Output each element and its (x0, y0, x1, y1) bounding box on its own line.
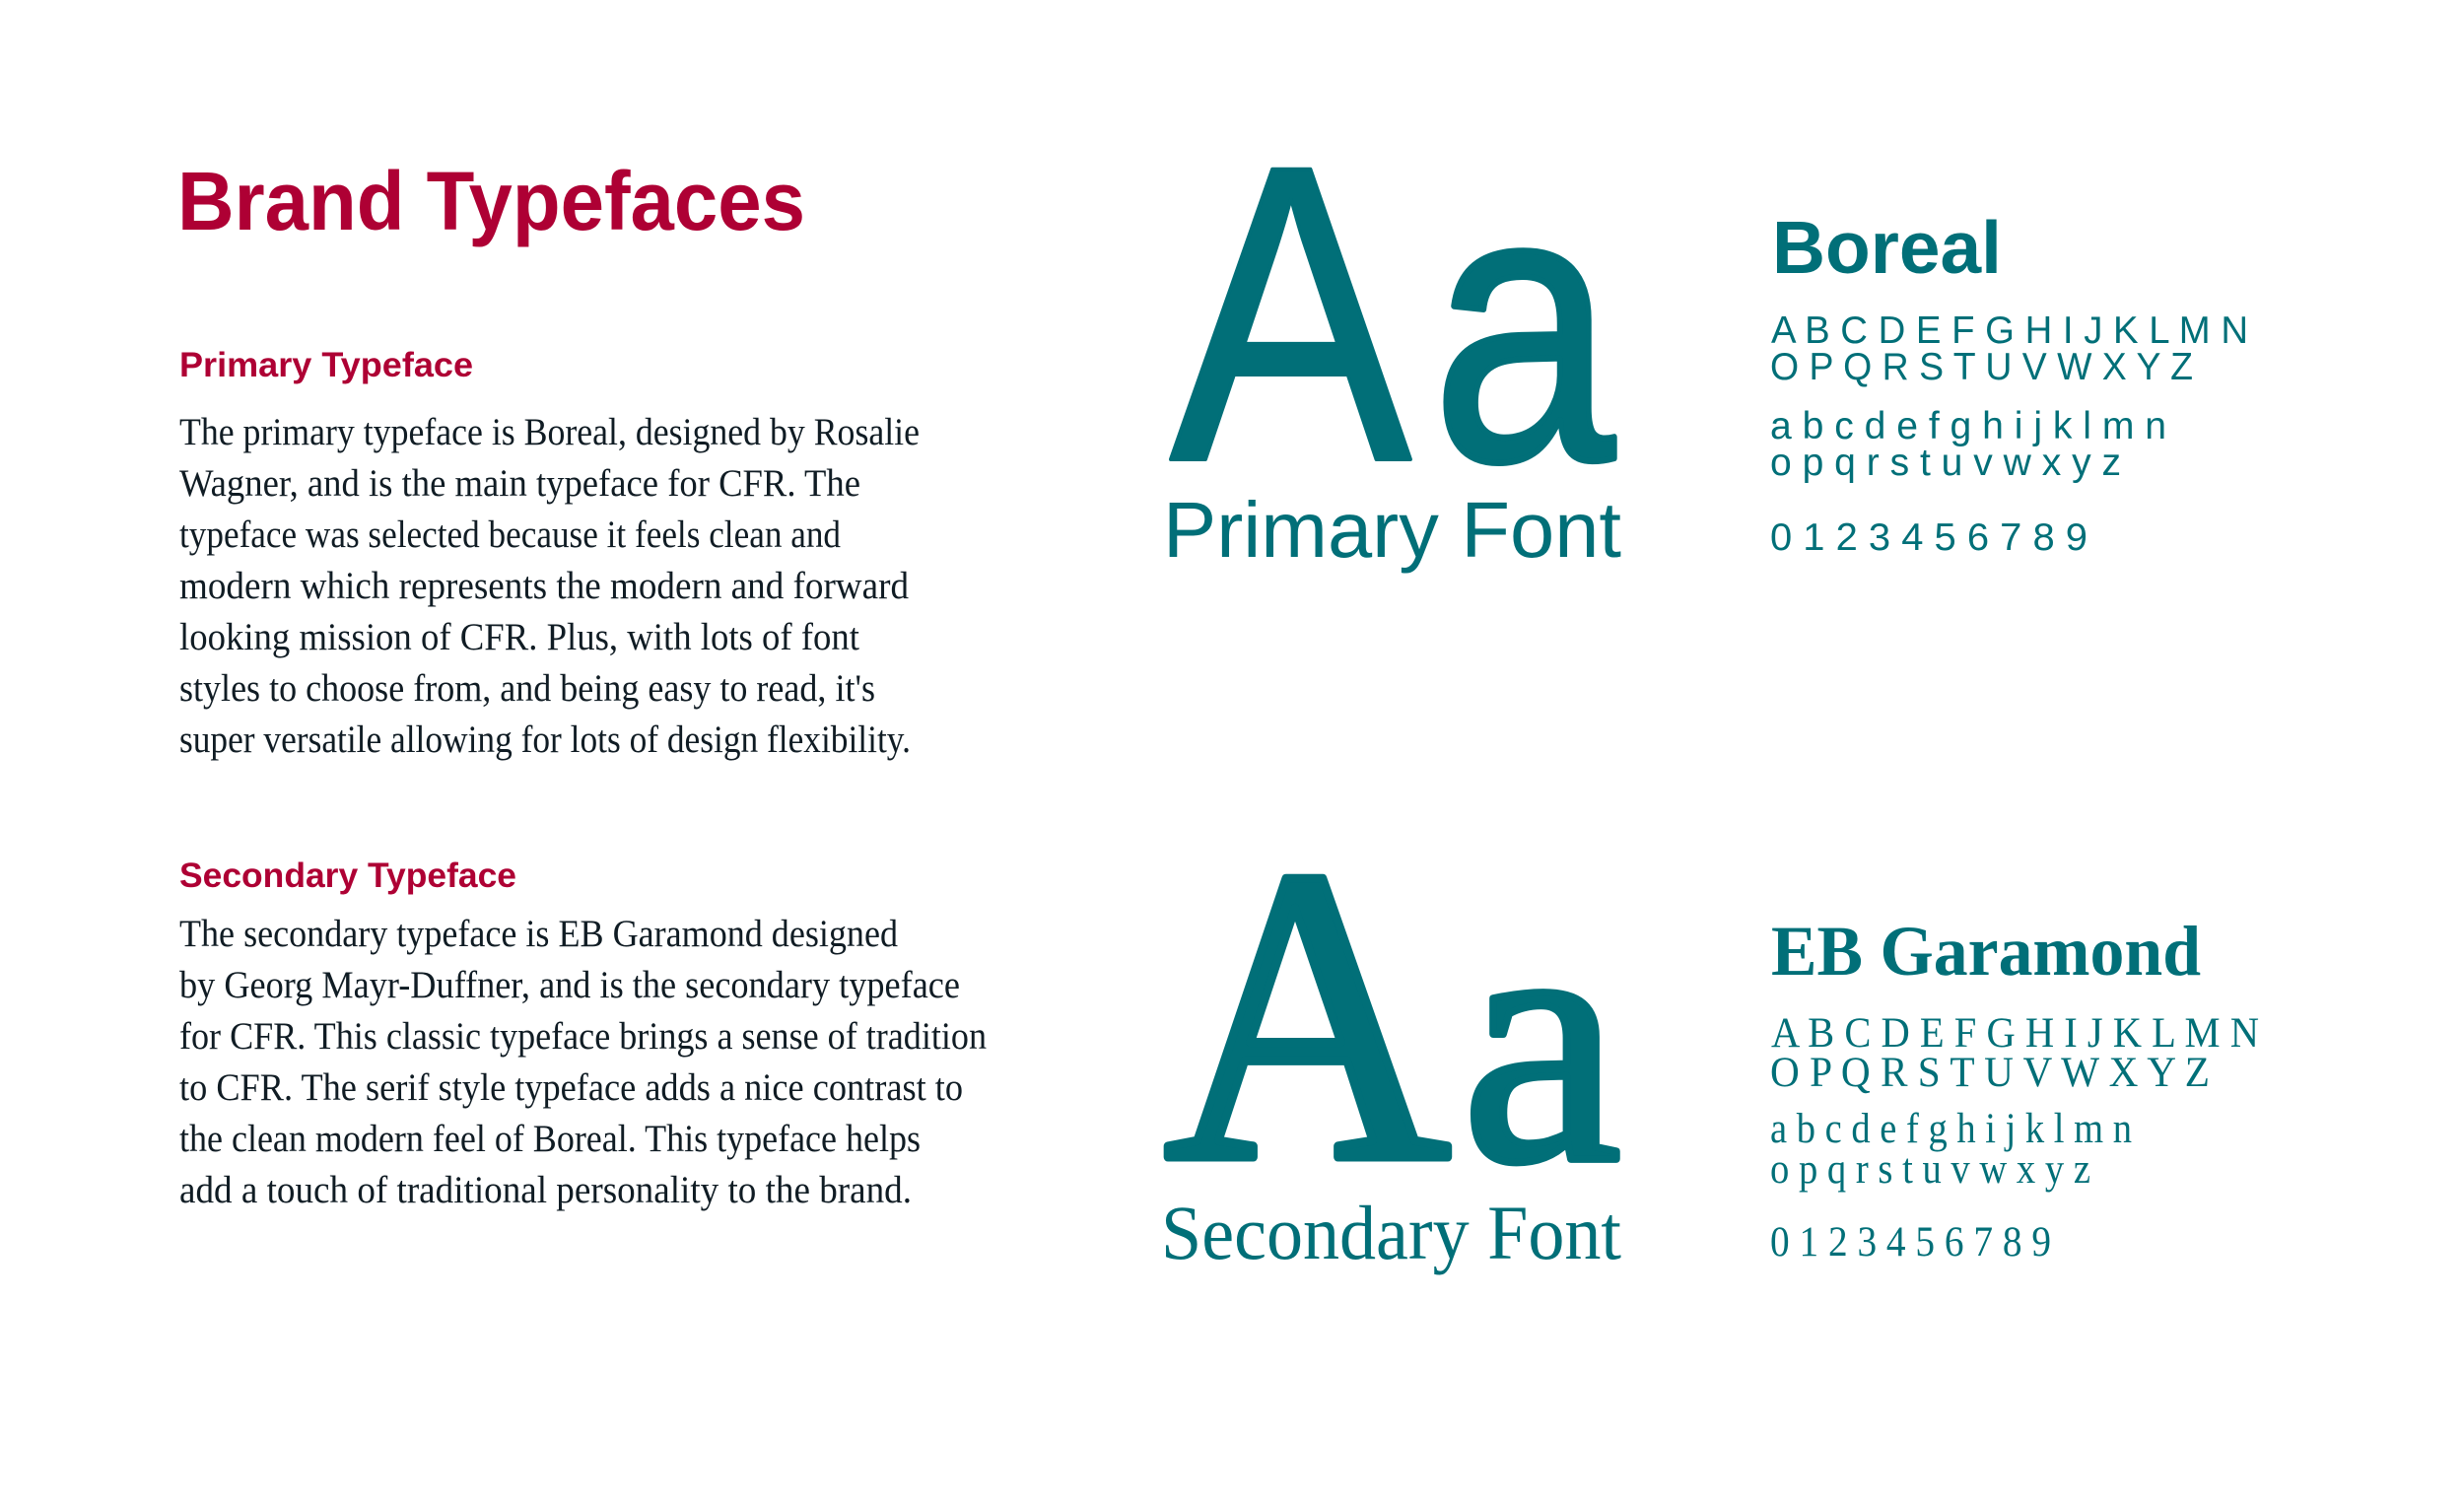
panel: secondary font specimen (1161, 782, 2259, 1275)
text block: primary typeface body: typeface was selected because it feels clean and (179, 513, 841, 556)
large glyph specimen: secondary Aa: A (1164, 782, 1451, 1249)
character set: Boreal: 0 1 2 3 4 5 6 7 8 9 (1770, 516, 2088, 559)
character set: Boreal: a b c d e f g h i j k l m n (1770, 405, 2166, 447)
text block: secondary typeface body: The secondary typeface is EB Garamond designed (179, 913, 898, 955)
character set: EB Garamond (1770, 1010, 2259, 1266)
large glyph specimen: primary Aa: A (1170, 79, 1413, 549)
text block: primary typeface body: super versatile allowing for lots of design flexibility. (179, 719, 911, 761)
text block: secondary typeface body: add a touch of traditional personality to the brand. (179, 1169, 912, 1211)
font name: Boreal: Boreal (1772, 206, 2002, 289)
text block: primary typeface body: The primary typeface is Boreal, designed by Rosalie (179, 411, 920, 453)
character set: EB Garamond: a b c d e f g h i j k l m n (1770, 1106, 2132, 1152)
heading: primary typeface: Primary Typeface (179, 346, 473, 384)
text block: secondary typeface body: for CFR. This classic typeface brings a sense of tradition (179, 1015, 987, 1058)
label: primary font: Primary Font (1163, 486, 1621, 574)
character set: Boreal (1770, 309, 2248, 559)
title: Brand Typefaces (177, 155, 805, 247)
large glyph specimen: secondary Aa: a (1462, 844, 1621, 1237)
large glyph specimen: primary Aa (1170, 79, 1616, 549)
panel: secondary typeface description (179, 856, 987, 1211)
character set: Boreal: A B C D E F G H I J K L M N (1771, 309, 2248, 352)
character set: EB Garamond: A B C D E F G H I J K L M N (1771, 1010, 2259, 1057)
character set: EB Garamond: 0 1 2 3 4 5 6 7 8 9 (1770, 1219, 2051, 1266)
text block: primary typeface body (179, 411, 920, 761)
text block: secondary typeface body: the clean modern feel of Boreal. This typeface helps (179, 1118, 921, 1160)
large glyph specimen: secondary Aa (1164, 782, 1621, 1249)
panel: primary font specimen (1163, 79, 2248, 574)
text block: secondary typeface body: by Georg Mayr-Duffner, and is the secondary typeface (179, 964, 960, 1006)
character set: Boreal: O P Q R S T U V W X Y Z (1770, 346, 2193, 388)
large glyph specimen: primary Aa: a (1432, 109, 1616, 542)
character set: Boreal: o p q r s t u v w x y z (1770, 442, 2121, 484)
heading: secondary typeface: Secondary Typeface (179, 856, 516, 895)
text block: primary typeface body: looking mission of CFR. Plus, with lots of font (179, 616, 859, 658)
text block: primary typeface body: styles to choose from, and being easy to read, it's (179, 667, 875, 710)
text block: secondary typeface body (179, 913, 987, 1211)
character set: EB Garamond: O P Q R S T U V W X Y Z (1770, 1050, 2210, 1096)
label: secondary font: Secondary Font (1161, 1190, 1621, 1275)
panel: primary typeface description (179, 346, 920, 761)
text block: primary typeface body: modern which represents the modern and forward (179, 565, 909, 607)
text block: primary typeface body: Wagner, and is the main typeface for CFR. The (179, 462, 860, 505)
font name: EB Garamond: EB Garamond (1771, 912, 2201, 991)
text block: secondary typeface body: to CFR. The serif style typeface adds a nice contrast to (179, 1066, 963, 1109)
character set: EB Garamond: o p q r s t u v w x y z (1770, 1146, 2090, 1193)
